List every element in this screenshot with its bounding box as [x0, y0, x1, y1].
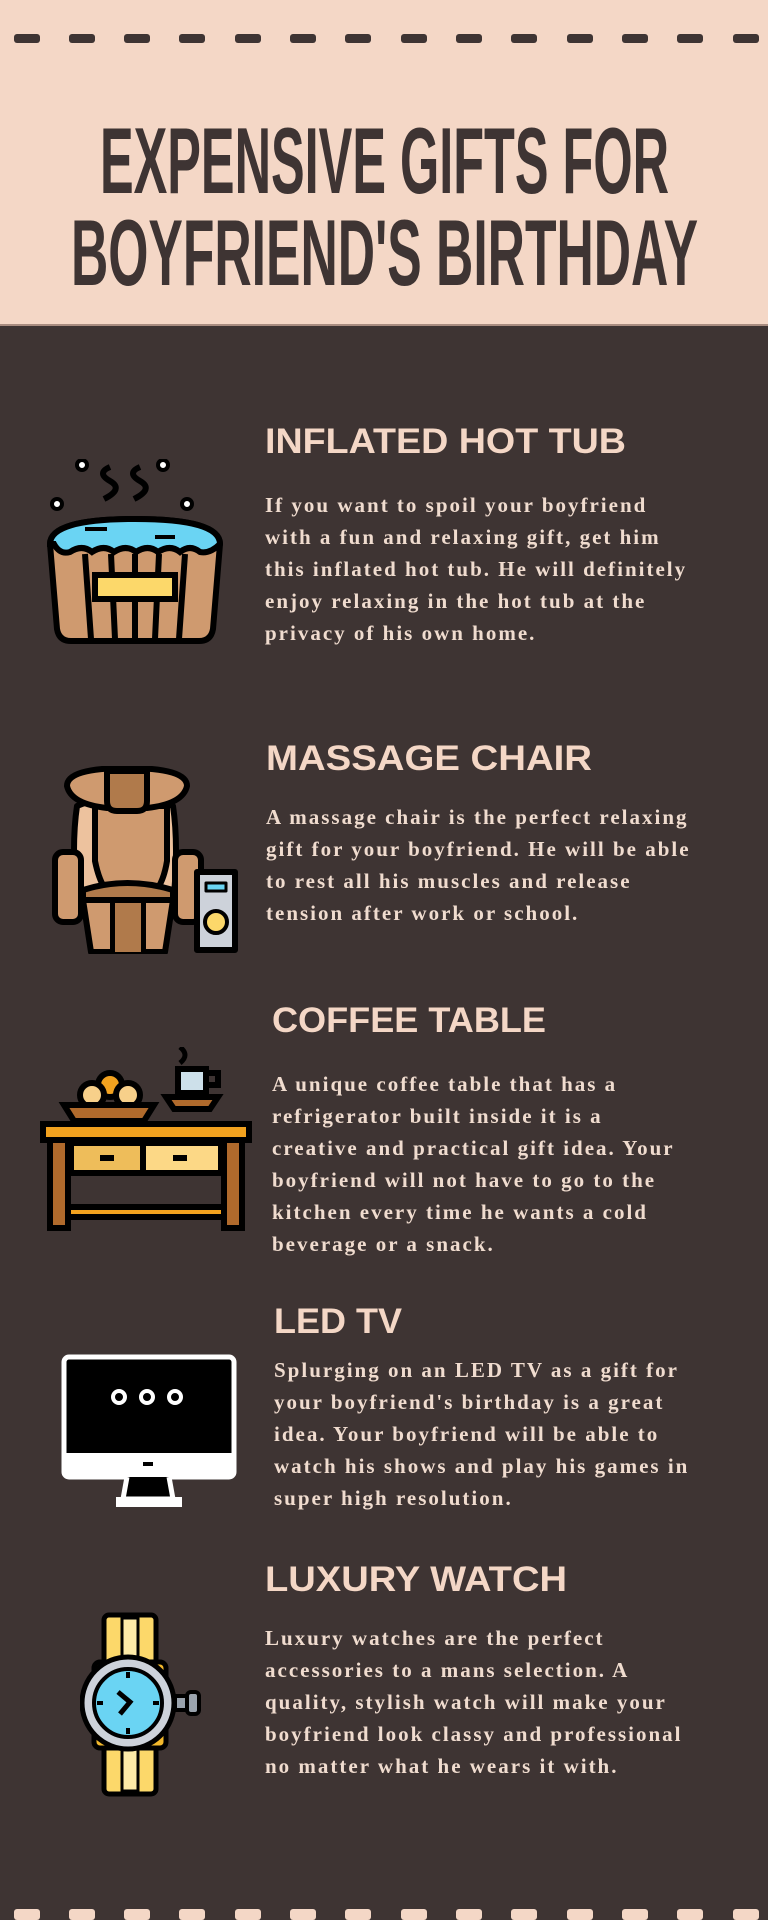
text: coffee table description — [272, 1072, 675, 1256]
text: luxury watch description: quality, stylish watch will make your — [265, 1690, 667, 1714]
text: hot tub description: with a fun and relaxing gift, get him — [265, 525, 661, 549]
icon: coffee table — [40, 1047, 252, 1231]
text: coffee table description: beverage or a snack. — [272, 1232, 495, 1256]
text: hot tub description: If you want to spoil your boyfriend — [265, 493, 647, 517]
text: LED TV description: your boyfriend's birthday is a great — [274, 1390, 664, 1414]
icon: luxury watch — [80, 1612, 201, 1796]
heading: inflated hot tub: INFLATED HOT TUB — [265, 422, 626, 461]
text: hot tub description: enjoy relaxing in the hot tub at the — [265, 589, 646, 613]
item: LED TV — [62, 1302, 689, 1510]
text: hot tub description — [265, 493, 687, 645]
text: LED TV description: super high resolution. — [274, 1486, 513, 1510]
text: coffee table description: A unique coffee table that has a — [272, 1072, 617, 1096]
text: LED TV description — [274, 1358, 689, 1510]
icon: hot tub — [47, 459, 223, 644]
icon: LED TV — [62, 1354, 236, 1507]
text: luxury watch description: no matter what he wears it with. — [265, 1754, 618, 1778]
text: massage chair description: A massage chair is the perfect relaxing — [266, 805, 689, 829]
text: LED TV description: idea. Your boyfriend will be able to — [274, 1422, 659, 1446]
text: massage chair description: gift for your boyfriend. He will be able — [266, 837, 691, 861]
text: coffee table description: refrigerator built inside it is a — [272, 1104, 603, 1128]
header panel — [0, 0, 768, 326]
text: coffee table description: creative and practical gift idea. Your — [272, 1136, 675, 1160]
item: hot tub — [47, 422, 687, 645]
item: coffee table — [40, 1001, 675, 1256]
text: coffee table description: boyfriend will not have to go to the — [272, 1168, 656, 1192]
title — [71, 108, 698, 300]
text: massage chair description: tension after work or school. — [266, 901, 579, 925]
text: luxury watch description: Luxury watches are the perfect — [265, 1626, 605, 1650]
bottom dashed line — [14, 1909, 759, 1920]
item: luxury watch — [80, 1560, 683, 1796]
heading: luxury watch: LUXURY WATCH — [265, 1560, 567, 1599]
text: luxury watch description — [265, 1626, 683, 1778]
text: LED TV description: watch his shows and play his games in — [274, 1454, 689, 1478]
text: luxury watch description: boyfriend look classy and professional — [265, 1722, 683, 1746]
heading: massage chair: MASSAGE CHAIR — [266, 739, 592, 778]
text: massage chair description: to rest all his muscles and release — [266, 869, 632, 893]
item: massage chair — [52, 739, 691, 954]
text: hot tub description: privacy of his own home. — [265, 621, 536, 645]
text: coffee table description: kitchen every time he wants a cold — [272, 1200, 648, 1224]
heading: coffee table: COFFEE TABLE — [272, 1001, 546, 1040]
text: hot tub description: this inflated hot tub. He will definitely — [265, 557, 687, 581]
top dashed line — [14, 34, 759, 43]
text: luxury watch description: accessories to a mans selection. A — [265, 1658, 629, 1682]
heading: LED TV: LED TV — [274, 1302, 403, 1341]
icon: massage chair — [52, 766, 238, 954]
text: massage chair description — [266, 805, 691, 925]
text: LED TV description: Splurging on an LED TV as a gift for — [274, 1358, 679, 1382]
